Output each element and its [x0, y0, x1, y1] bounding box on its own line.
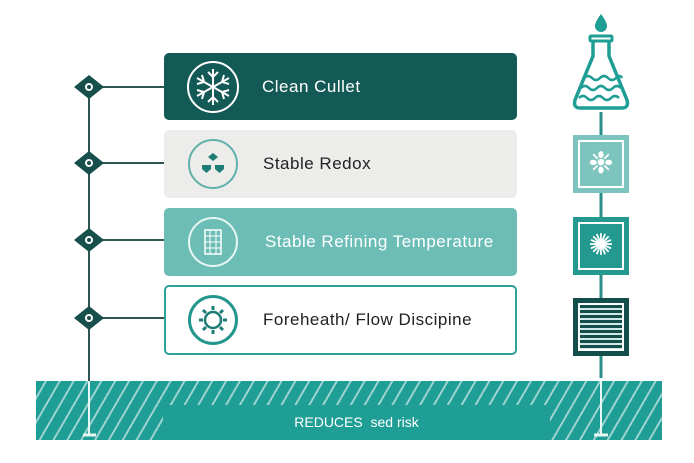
icon: flask — [572, 14, 630, 110]
icon box: light snowflake: ❉ — [588, 147, 614, 180]
icon box: teal snowflake: ✺ — [588, 229, 614, 262]
icon box: teal snowflake — [573, 217, 629, 275]
label: reduces sed risk — [163, 405, 550, 440]
card: forehearth flow discipline — [164, 285, 517, 355]
card: stable refining temperature — [164, 208, 517, 276]
icon box: dark grille — [573, 298, 629, 356]
ground band — [36, 381, 662, 440]
card: forehearth flow discipline: Foreheath/ Flow Discipine — [263, 310, 472, 329]
label: reduces sed risk: REDUCES sed risk — [294, 414, 419, 430]
card: stable redox — [164, 130, 517, 198]
card: stable redox: Stable Redox — [263, 154, 371, 173]
card: stable refining temperature: Stable Refining Temperature — [265, 232, 494, 251]
card: clean cullet: Clean Cullet — [262, 76, 361, 96]
right spine — [600, 112, 602, 378]
card: clean cullet — [164, 53, 517, 120]
icon box: light snowflake — [573, 135, 629, 193]
